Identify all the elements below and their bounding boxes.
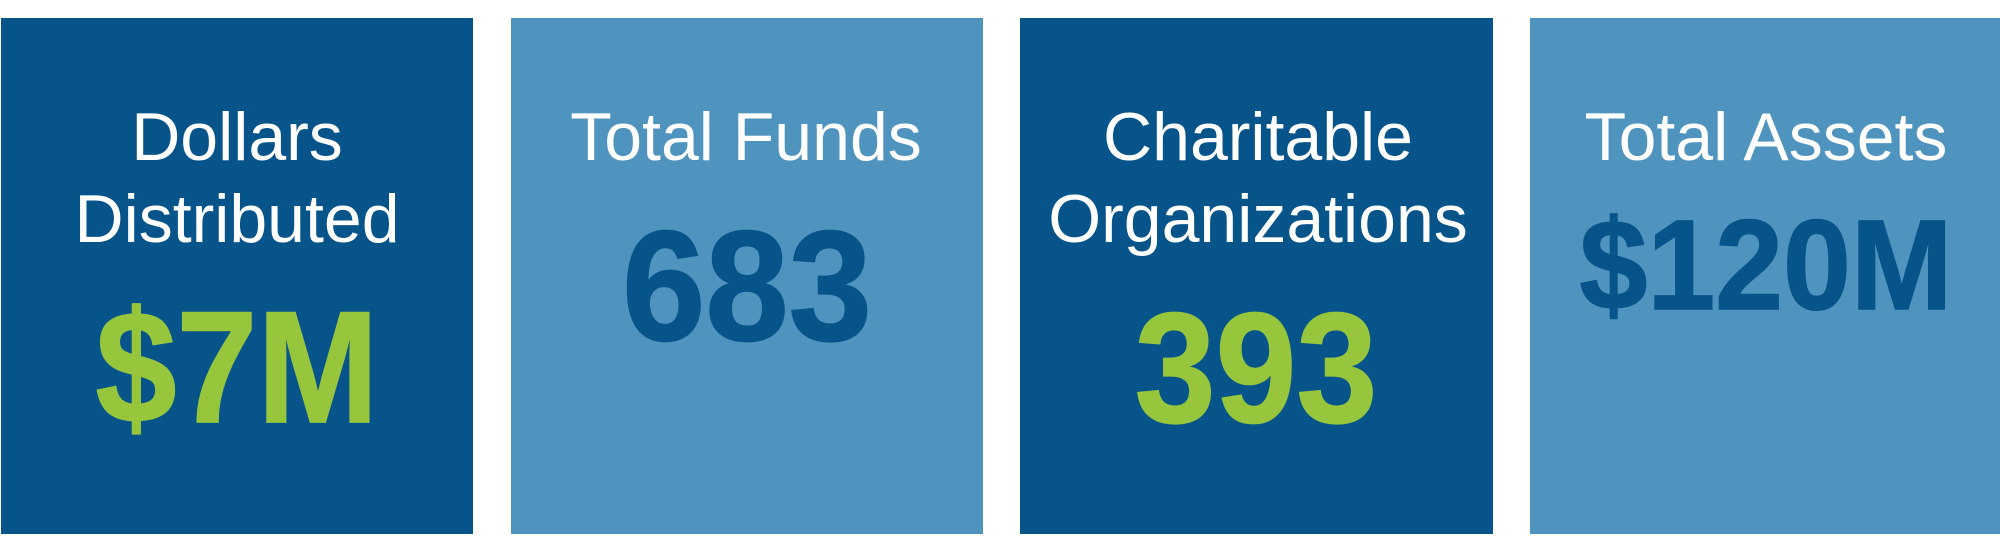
heading: dollars distributed: Dollars: [131, 99, 343, 175]
number: $7M: $7M: [96, 279, 378, 456]
panel: dollars distributed: [1, 18, 473, 534]
panel: total assets: [1530, 18, 2000, 534]
panel background: dollars distributed: [1, 18, 473, 534]
heading: charitable organizations: Charitable: [1103, 99, 1413, 175]
number: $120M: $120M: [1579, 193, 1953, 337]
number: 393: 393: [1135, 281, 1377, 456]
panel: total funds: [511, 18, 983, 534]
heading: charitable organizations: Organizations: [1048, 181, 1468, 257]
panel background: total funds: [511, 18, 983, 534]
panel background: total assets: [1530, 18, 2000, 534]
heading: total funds: Total Funds: [570, 99, 922, 175]
heading: dollars distributed: Distributed: [74, 181, 400, 257]
number: 683: 683: [622, 198, 872, 374]
panel: charitable organizations: [1020, 18, 1493, 534]
heading: total assets: Total Assets: [1585, 99, 1947, 175]
panel background: charitable organizations: [1020, 18, 1493, 534]
